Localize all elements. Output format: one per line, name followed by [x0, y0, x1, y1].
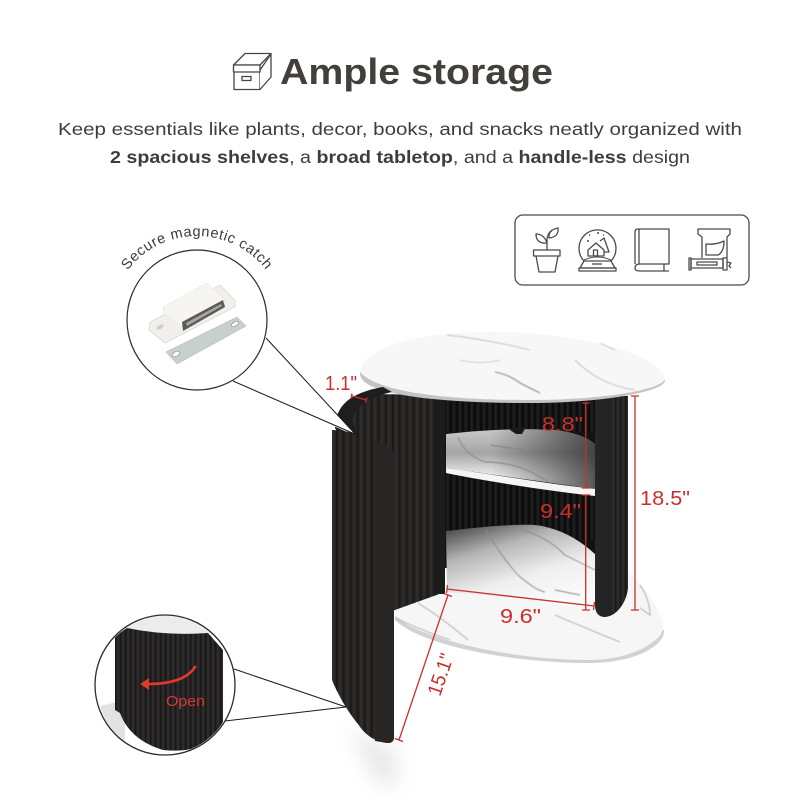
dimension: door height [395, 594, 452, 742]
panel: item icons [515, 215, 749, 285]
door thickness top [335, 387, 394, 455]
dimension labels: 9.4" [540, 501, 581, 523]
dimension labels: 9.6" [500, 606, 541, 628]
icon: potted plant [534, 228, 560, 272]
title [234, 51, 553, 92]
callout leader lines [233, 338, 358, 437]
dimensions [351, 394, 639, 742]
open label: Open [166, 693, 205, 710]
white wedge at door [233, 338, 358, 437]
magnetic catch image [149, 283, 246, 364]
icon: snacks [689, 229, 731, 270]
callout circle [127, 250, 267, 390]
dimension labels [325, 373, 690, 699]
interior flutes [446, 470, 595, 540]
inner door smooth edge [435, 398, 445, 594]
dimension: door thickness [351, 394, 367, 402]
marble base [395, 570, 664, 663]
floor shadow [350, 730, 396, 785]
callout: open direction [95, 612, 346, 755]
dimension labels: 18.5" [640, 488, 690, 510]
right column [595, 396, 628, 617]
subtitle text [58, 119, 742, 167]
inner door panel [353, 394, 445, 620]
dimension labels: 15.1" [424, 651, 459, 699]
marble floor [446, 525, 596, 608]
icon: storage box [234, 54, 271, 90]
dimension labels: 8.8" [542, 414, 583, 436]
callout leader lines [225, 669, 346, 721]
title text: Ample storage [280, 51, 553, 92]
dimension: interior width [446, 585, 594, 610]
dimension: total height [631, 396, 639, 610]
subtitle text: 2 spacious shelves , a broad tabletop , and a handle-less design [110, 147, 690, 167]
door front [332, 430, 394, 743]
dimension labels: 1.1" [325, 373, 357, 395]
callout: magnetic catch [122, 228, 357, 436]
dimension: upper shelf height [582, 403, 590, 488]
icon: snow globe [579, 230, 616, 271]
arrow: open [140, 667, 195, 690]
dimension: lower shelf height [582, 495, 590, 610]
tabletop [360, 332, 665, 403]
subtitle text: Keep essentials like plants, decor, books, and snacks neatly organized with [58, 119, 742, 139]
side table [233, 332, 665, 743]
icon: book [635, 229, 669, 271]
callout label: Secure magnetic catch [122, 228, 271, 270]
upper interior flutes [446, 400, 595, 432]
callout circle [95, 615, 235, 755]
callout detail image [100, 616, 223, 751]
interior back wall [445, 398, 596, 568]
shelf [446, 427, 595, 496]
